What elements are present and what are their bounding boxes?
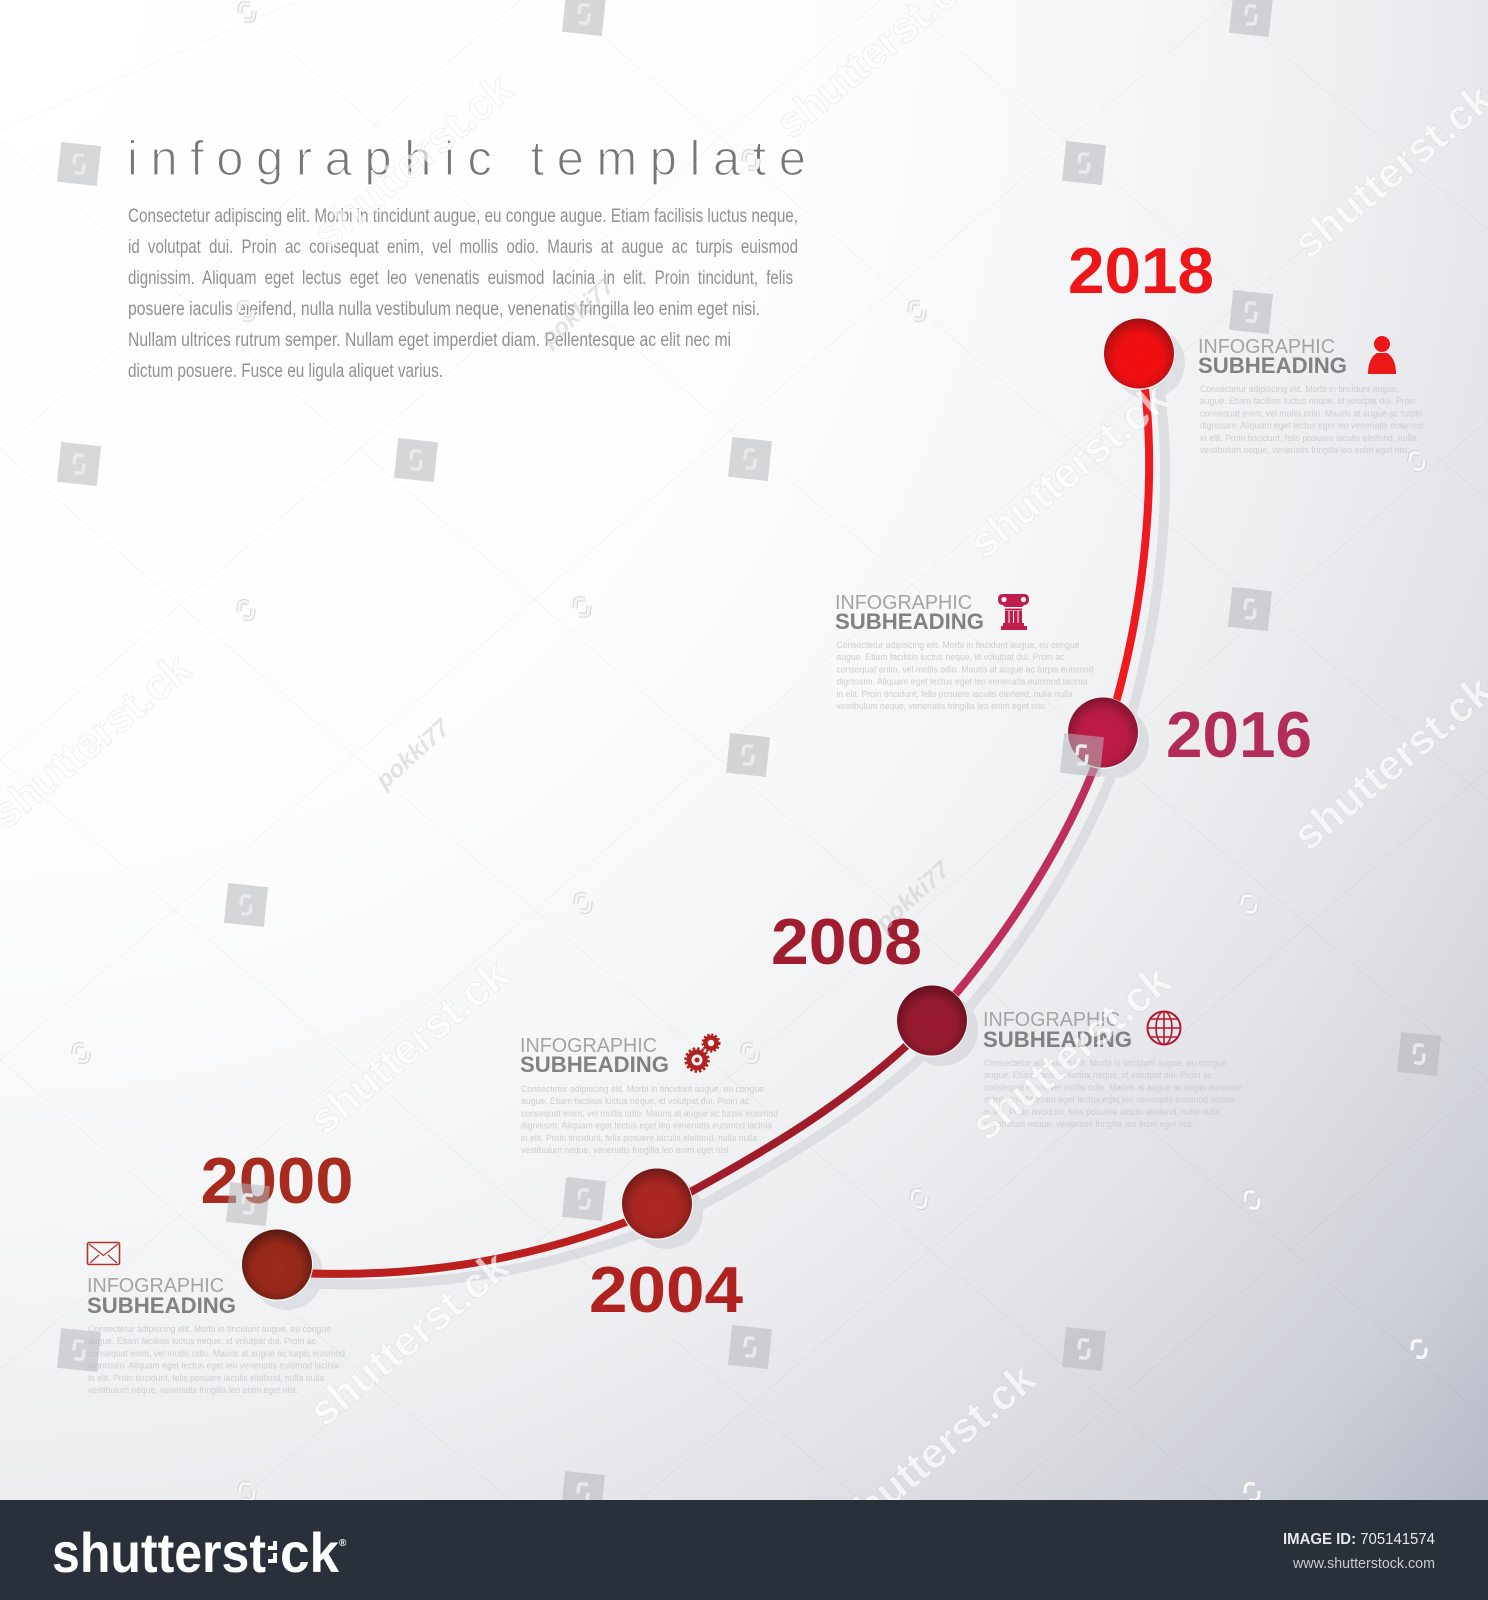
info block 2016 bbox=[835, 592, 1094, 712]
year 2008: 2008 bbox=[771, 905, 922, 978]
logo: shutterstock: ck bbox=[280, 1521, 340, 1584]
body text: Consectetur adipiscing elit. Morbi in tincidunt augue, eu congue bbox=[521, 1084, 764, 1095]
body text: vestibulum neque, venenatis fringilla leo enim eget nisi. bbox=[521, 1145, 731, 1156]
body text: Consectetur adipiscing elit. Morbi in tincidunt augue, bbox=[1200, 384, 1399, 395]
body text: consequat enim, vel mollis odio. Mauris at augue ac turpis euismod bbox=[984, 1082, 1241, 1093]
body text: vestibulum neque, venenatis fringilla leo enim eget nisi. bbox=[836, 701, 1046, 712]
body text: Consectetur adipiscing elit. Morbi in tincidunt augue, eu congue bbox=[836, 640, 1080, 651]
subheading: SUBHEADING bbox=[983, 1027, 1132, 1052]
watermark overlay: shutterst.ck bbox=[304, 64, 522, 258]
subheading: SUBHEADING bbox=[835, 609, 984, 634]
icon: envelope bbox=[88, 1242, 120, 1264]
intro text block: dignissim. Aliquam eget lectus eget leo venenatis euismod lacinia in elit. Proin tincidunt, felis bbox=[128, 268, 793, 289]
body text: dignissim. Aliquam eget lectus eget leo venenatis euismod lacinia bbox=[88, 1361, 340, 1372]
body text bbox=[836, 640, 1094, 712]
body text: dignissim. Aliquam eget lectus eget leo venenatis euismod bbox=[1200, 421, 1423, 432]
body text: augue. Etiam facilisis luctus neque, id volutpat dui. Proin ac bbox=[984, 1070, 1212, 1081]
milestone 2018 bbox=[1068, 234, 1214, 390]
subheading: INFOGRAPHIC bbox=[835, 592, 972, 614]
heading: infographic template: infographic template bbox=[127, 132, 806, 186]
subheading bbox=[520, 1035, 669, 1077]
body text bbox=[1200, 384, 1423, 456]
milestone 2000 bbox=[200, 1144, 354, 1301]
body text: in elit. Proin tincidunt, felis posuere iaculis eleifend, nulla nulla bbox=[836, 689, 1073, 700]
body text: consequat enim, vel mollis odio. Mauris at augue ac turpis bbox=[1200, 408, 1422, 419]
icon: column bbox=[998, 594, 1029, 630]
subheading: INFOGRAPHIC bbox=[520, 1035, 657, 1057]
intro text block: id volutpat dui. Proin ac consequat enim, vel mollis odio. Mauris at augue ac turpis euismod bbox=[128, 237, 798, 258]
subheading: INFOGRAPHIC bbox=[1198, 336, 1335, 358]
body text: dignissim. Aliquam eget lectus eget leo venenatis euismod lacinia bbox=[521, 1121, 773, 1132]
body text: consequat enim, vel mollis odio. Mauris at augue ac turpis euismod bbox=[836, 664, 1094, 675]
body text: Consectetur adipiscing elit. Morbi in tincidunt augue, eu congue bbox=[88, 1324, 331, 1335]
year 2000: 2000 bbox=[200, 1144, 354, 1217]
watermark overlay: shutterst.ck bbox=[300, 950, 518, 1144]
body text: dignissim. Aliquam eget lectus eget leo venenatis euismod lacinia bbox=[836, 677, 1088, 688]
info block 2000 bbox=[87, 1242, 345, 1396]
body text: in elit. Proin tincidunt, felis posuere iaculis eleifend, nulla nulla bbox=[88, 1373, 325, 1384]
watermark overlay: shutterst.ck bbox=[827, 1354, 1045, 1548]
watermark overlay: pokki77 bbox=[370, 713, 456, 795]
watermark overlay: shutterst.ck bbox=[962, 956, 1180, 1150]
body text: Consectetur adipiscing elit. Morbi in tincidunt augue, eu congue bbox=[984, 1058, 1227, 1069]
body text: in elit. Proin tincidunt, felis posuere iaculis eleifend, nulla nulla bbox=[984, 1107, 1221, 1118]
subheading: SUBHEADING bbox=[1198, 353, 1347, 378]
watermark overlay: pokki77 bbox=[870, 855, 956, 937]
subheading: SUBHEADING bbox=[520, 1052, 669, 1077]
intro text block: posuere iaculis eleifend, nulla nulla vestibulum neque, venenatis fringilla leo enim eget nisi. bbox=[128, 299, 760, 320]
icon: gears bbox=[686, 1034, 720, 1072]
body text: vestibulum neque, venenatis fringilla leo enim eget nisi. bbox=[1200, 445, 1410, 456]
info block 2004 bbox=[520, 1034, 778, 1156]
logo: shutterstock: shutterst bbox=[52, 1521, 266, 1584]
milestone 2008 bbox=[771, 905, 968, 1057]
milestone 2004 bbox=[589, 1168, 743, 1326]
watermark overlay: pokki77 bbox=[535, 271, 621, 353]
logo: shutterstock: ® bbox=[339, 1538, 347, 1549]
info block 2008 bbox=[983, 1009, 1241, 1130]
body text bbox=[88, 1324, 345, 1396]
watermark overlay: shutterst.ck bbox=[960, 374, 1178, 568]
subheading bbox=[835, 592, 984, 634]
subheading: INFOGRAPHIC bbox=[87, 1275, 224, 1297]
watermark overlay: shutterst.ck bbox=[300, 1242, 518, 1436]
website: www.shutterstock.com bbox=[1292, 1556, 1435, 1572]
subheading: SUBHEADING bbox=[87, 1293, 236, 1318]
body text: augue. Etiam facilisis luctus neque, id volutpat dui. Proin ac bbox=[521, 1096, 749, 1107]
year 2018: 2018 bbox=[1068, 234, 1214, 307]
body text bbox=[521, 1084, 778, 1156]
body text: vestibulum neque, venenatis fringilla leo enim eget nisi. bbox=[984, 1119, 1194, 1130]
body text: in elit. Proin tincidunt, felis posuere iaculis eleifend, nulla nulla bbox=[521, 1133, 758, 1144]
icon: globe bbox=[1148, 1012, 1180, 1044]
body text: vestibulum neque, venenatis fringilla leo enim eget nisi. bbox=[88, 1385, 298, 1396]
body text bbox=[984, 1058, 1241, 1130]
subheading bbox=[1198, 336, 1347, 378]
intro text block: Consectetur adipiscing elit. Morbi in tincidunt augue, eu congue augue. Etiam facilisis luctus neque, bbox=[128, 206, 798, 227]
body text: augue. Etiam facilisis luctus neque, id volutpat dui. Proin ac bbox=[836, 652, 1065, 663]
body text: augue. Etiam facilisis luctus neque, id volutpat dui. Proin bbox=[1200, 396, 1416, 407]
footer bar bbox=[0, 1500, 1488, 1600]
body text: dignissim. Aliquam eget lectus eget leo venenatis euismod lacinia bbox=[984, 1095, 1236, 1106]
subheading bbox=[87, 1275, 236, 1318]
year 2004: 2004 bbox=[589, 1253, 743, 1326]
icon: person bbox=[1368, 336, 1396, 374]
info block 2018 bbox=[1198, 336, 1423, 456]
subheading: INFOGRAPHIC bbox=[983, 1009, 1120, 1031]
subheading bbox=[983, 1009, 1132, 1052]
image id: IMAGE ID: 705141574 bbox=[1283, 1531, 1435, 1548]
body text: consequat enim, vel mollis odio. Mauris at augue ac turpis euismod bbox=[521, 1108, 778, 1119]
body text: in elit. Proin tincidunt, felis posuere iaculis eleifend, nulla bbox=[1200, 433, 1417, 444]
year 2016: 2016 bbox=[1166, 698, 1312, 771]
intro text block: dictum posuere. Fusce eu ligula aliquet varius. bbox=[128, 361, 443, 382]
intro text block: Nullam ultrices rutrum semper. Nullam eget imperdiet diam. Pellentesque ac elit nec mi bbox=[128, 330, 731, 351]
intro text block bbox=[128, 206, 798, 382]
milestone 2016 bbox=[1067, 697, 1312, 771]
timeline curve bbox=[251, 327, 1185, 1310]
body text: consequat enim, vel mollis odio. Mauris at augue ac turpis euismod bbox=[88, 1348, 345, 1359]
body text: augue. Etiam facilisis luctus neque, id volutpat dui. Proin ac bbox=[88, 1336, 316, 1347]
